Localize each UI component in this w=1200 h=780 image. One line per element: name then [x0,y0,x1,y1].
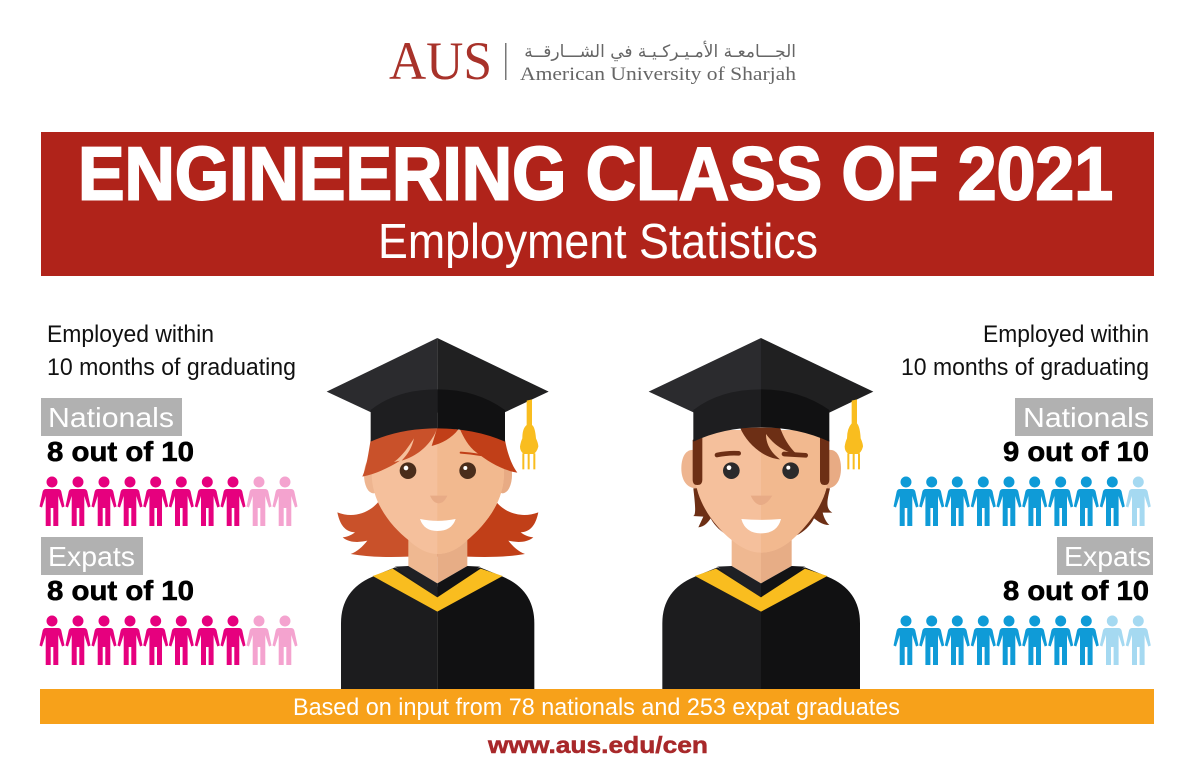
stat: expats 8 out of 10 right: 8 out of 10 [1003,575,1149,606]
website link: www.aus.edu/cen [487,732,708,758]
tag: expats right: Expats [1064,541,1151,572]
title banner: Employment Statistics [378,215,818,269]
tag: expats left: Expats [48,541,135,572]
intro text left: 10 months of graduating [47,354,296,381]
tag: nationals right [1015,398,1153,436]
intro text right: Employed within [983,321,1149,348]
intro text left [47,321,296,381]
logo: American University of Sharjah: AUS [389,31,492,91]
intro text right [901,321,1149,381]
tag: nationals left: Nationals [48,402,174,433]
left panel: female graduates statistics [40,321,298,665]
right panel: male graduates statistics [894,321,1153,665]
intro text left: Employed within [47,321,214,348]
mortarboard cap [327,338,549,442]
illustration: female graduate [327,338,549,689]
stat: nationals 8 out of 10: 8 out of 10 [47,436,194,467]
face [364,430,512,554]
logo: American University of Sharjah: الجـــامعـة الأمـيـركـيـة في الشـــارقــة [524,41,796,62]
footer bar: sample note: Based on input from 78 nationals and 253 expat graduates [293,694,900,721]
tassel [845,399,863,469]
tag: expats left [41,537,143,575]
illustration: male graduate [649,338,873,689]
icons: 9 of 10 blue people [894,476,1151,526]
face [681,430,841,553]
gown [662,566,860,689]
icons: 8 of 10 pink people [40,476,298,526]
gown [341,566,534,689]
title banner [41,132,1154,276]
title banner: ENGINEERING CLASS OF 2021 [78,132,1113,216]
tag: nationals left [41,398,182,436]
logo: American University of Sharjah: American University of Sharjah [520,64,797,85]
footer bar: sample note [40,689,1154,724]
icons: 8 of 10 blue people [894,616,1151,665]
logo: American University of Sharjah [389,31,797,91]
stat: expats 8 out of 10: 8 out of 10 [47,575,194,606]
hair fringe [362,427,517,477]
tassel [520,399,538,469]
hair sideburns and fringe [693,428,829,485]
intro text right: 10 months of graduating [901,354,1149,381]
mortarboard cap [649,338,873,442]
icons: 8 of 10 pink people, expats [40,616,298,665]
tag: nationals right: Nationals [1023,402,1149,433]
stat: nationals 9 out of 10: 9 out of 10 [1003,436,1149,467]
